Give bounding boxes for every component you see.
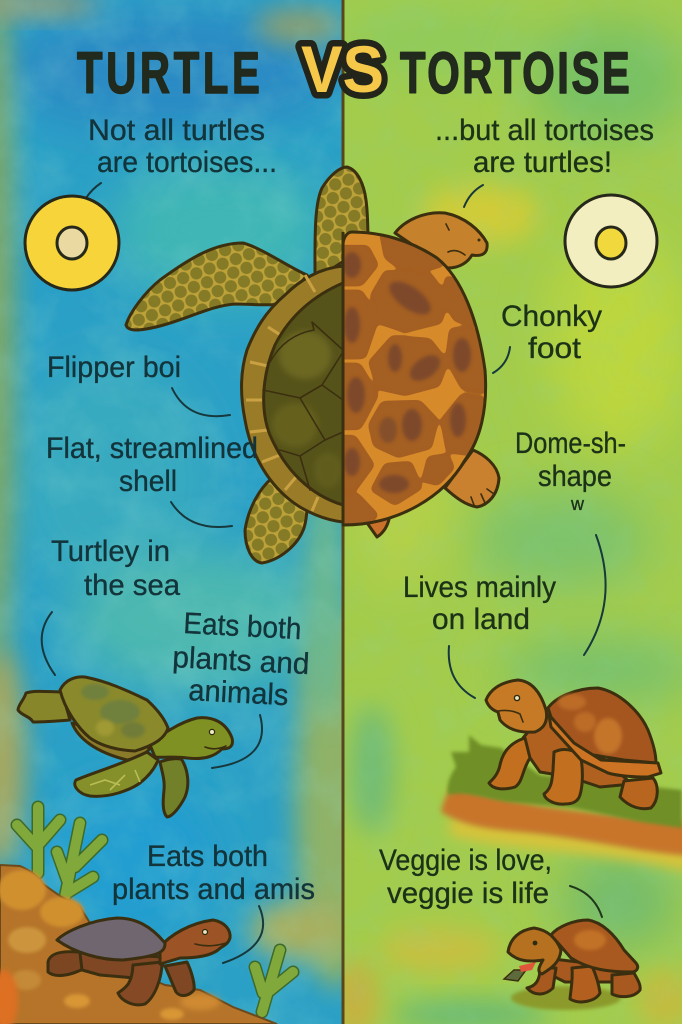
intro text: tortoises: are turtles! — [473, 146, 612, 179]
small tortoise eating — [504, 920, 640, 1010]
rear flipper — [245, 478, 307, 563]
turtle half shell — [241, 266, 343, 522]
label: turtley in the sea: the sea — [84, 569, 180, 602]
grassy mound with dirt — [441, 735, 682, 872]
tortoise foot — [445, 450, 499, 507]
panel: turtle side background — [0, 0, 375, 1024]
label: eats both plants and amis: plants and amis — [112, 873, 315, 906]
label: flat streamlined shell: shell — [119, 465, 177, 498]
label: flipper boi: Flipper boi — [47, 351, 181, 384]
seaweed cluster — [17, 807, 102, 897]
label: eats plants and animals — [172, 607, 310, 768]
title: TORTOISE: TORTOISE — [400, 40, 630, 106]
intro text: turtles: Not all turtles — [88, 114, 265, 147]
label: dome shape: shape — [538, 460, 612, 493]
intro text: turtles — [86, 114, 277, 198]
label: eats both plants and amis: Eats both — [147, 840, 268, 873]
tortoise head — [395, 213, 487, 268]
big tortoise — [486, 680, 661, 809]
label: lives mainly on land — [403, 571, 556, 698]
pond turtle — [48, 918, 230, 1005]
label: dome shape: w — [570, 494, 585, 514]
label: eats plants and animals: Eats both — [183, 607, 302, 646]
seaweed right — [255, 950, 293, 1012]
label: chonky foot: foot — [528, 332, 582, 365]
label: eats both plants and amis — [112, 840, 315, 963]
top flipper — [315, 167, 368, 280]
centre divider — [342, 0, 344, 1024]
label: flipper boi — [47, 351, 230, 416]
label: dome shape — [515, 427, 626, 655]
label: lives mainly on land: Lives mainly — [403, 571, 556, 604]
tortoise tail — [365, 514, 390, 537]
label: chonky foot: Chonky — [501, 300, 602, 333]
label: flat streamlined shell — [46, 432, 258, 527]
label: lives mainly on land: on land — [432, 603, 530, 636]
intro text: tortoises — [435, 114, 654, 207]
label: eats plants and animals: animals — [188, 674, 289, 712]
panel: tortoise side background — [330, 0, 682, 1024]
title: TURTLE: TURTLE — [77, 40, 260, 106]
label: turtley in the sea — [42, 535, 180, 675]
icon: yellow disc — [25, 196, 119, 290]
swimming sea turtle — [18, 677, 233, 817]
label: chonky foot — [493, 300, 602, 373]
intro text: tortoises: ...but all tortoises — [435, 114, 654, 147]
title: VS badge: VS — [301, 32, 384, 106]
label: eats plants and animals: plants and — [172, 641, 310, 681]
label: dome shape: Dome-sh- — [515, 427, 626, 460]
label: flat streamlined shell: Flat, streamlined — [46, 432, 258, 465]
icon: cream disc — [565, 195, 657, 287]
label: veggie is love: veggie is life — [387, 877, 549, 910]
main split turtle illustration — [126, 167, 499, 563]
label: veggie is love — [379, 844, 602, 917]
intro text: turtles: are tortoises... — [97, 146, 277, 179]
label: turtley in the sea: Turtley in — [51, 535, 170, 568]
left flipper — [126, 243, 307, 330]
label: veggie is love: Veggie is love, — [379, 844, 552, 877]
tortoise half shell — [335, 232, 490, 535]
rocky sea floor — [0, 865, 277, 1024]
